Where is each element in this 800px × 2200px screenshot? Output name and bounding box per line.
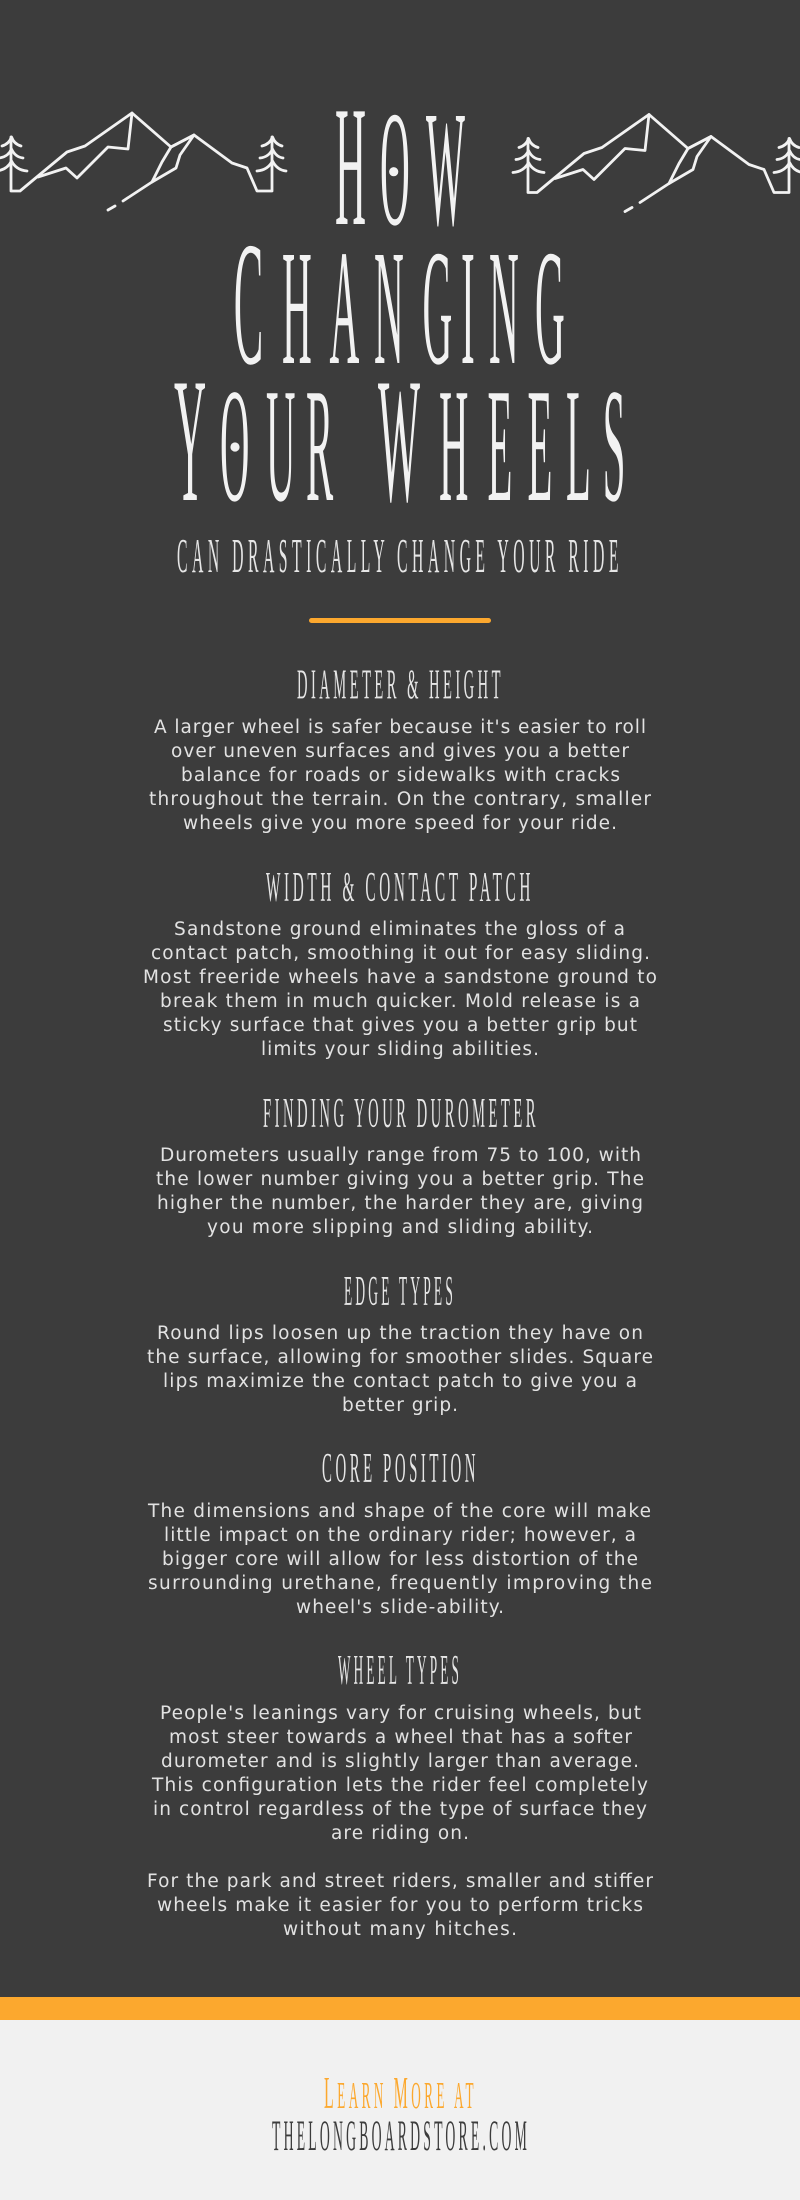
text block: the surface, allowing for smoother slides. Square bbox=[147, 1347, 653, 1368]
title: OW bbox=[380, 79, 465, 261]
title: H bbox=[335, 72, 366, 262]
text block: better grip. bbox=[342, 1395, 458, 1416]
text block: wheels give you more speed for your ride. bbox=[183, 813, 617, 834]
panel: diameter and height bbox=[149, 662, 651, 834]
panel: wheel types: WHEEL TYPES bbox=[338, 1648, 462, 1694]
text block: park and street: For the park and street riders, smaller and stiffer bbox=[147, 1871, 653, 1892]
text block: cruising wheels bbox=[151, 1703, 648, 1844]
icon: left mountains and trees bbox=[0, 113, 286, 210]
title: C bbox=[234, 205, 263, 401]
text block: Durometers usually range from 75 to 100, with bbox=[160, 1145, 641, 1166]
panel: width and contact patch bbox=[143, 865, 657, 1060]
text block bbox=[156, 1145, 644, 1238]
panel: finding your durometer bbox=[156, 1091, 644, 1238]
text block: limits your sliding abilities. bbox=[261, 1039, 539, 1060]
text block: cruising wheels: in control regardless of the type of surface they bbox=[153, 1799, 647, 1820]
text block: cruising wheels: most steer towards a wheel that has a softer bbox=[169, 1727, 632, 1748]
panel: wheel types bbox=[147, 1648, 653, 1940]
text block: A larger wheel is safer because it's easier to roll bbox=[154, 717, 646, 738]
text block bbox=[143, 919, 657, 1060]
text block: park and street: wheels make it easier for you to perform tricks bbox=[157, 1895, 643, 1916]
title: W bbox=[378, 342, 420, 540]
text block: cruising wheels: durometer and is slightly larger than average. bbox=[161, 1751, 639, 1772]
title: OUR bbox=[220, 355, 360, 536]
text block: sticky surface that gives you a better grip but bbox=[163, 1015, 637, 1036]
text block: bigger core will allow for less distortion of the bbox=[162, 1549, 638, 1570]
panel: edge types bbox=[147, 1269, 653, 1416]
text block bbox=[147, 1501, 652, 1618]
text block: The dimensions and shape of the core will make bbox=[147, 1501, 651, 1522]
text block: higher the number, the harder they are, giving bbox=[157, 1193, 643, 1214]
panel: core position: CORE POSITION bbox=[322, 1446, 479, 1492]
divider: orange rule bbox=[309, 618, 491, 623]
text block: balance for roads or sidewalks with cracks bbox=[181, 765, 620, 786]
orange band bbox=[0, 1997, 800, 2020]
text block: lips maximize the contact patch to give you a bbox=[163, 1371, 637, 1392]
text block: over uneven surfaces and gives you a better bbox=[171, 741, 629, 762]
text block bbox=[149, 717, 651, 834]
title: HEELS bbox=[439, 355, 625, 536]
icon: right mountains and trees bbox=[513, 114, 800, 212]
title: HANGING bbox=[282, 218, 565, 400]
text block: surrounding urethane, frequently improving the bbox=[148, 1573, 652, 1594]
title: Y bbox=[174, 342, 206, 540]
text block: Sandstone ground eliminates the gloss of a bbox=[174, 919, 625, 940]
text block: Most freeride wheels have a sandstone ground to bbox=[143, 967, 657, 988]
text block: the lower number giving you a better grip. The bbox=[156, 1169, 644, 1190]
text block bbox=[147, 1323, 653, 1416]
text block: Round lips loosen up the traction they have on bbox=[157, 1323, 643, 1344]
text block: break them in much quicker. Mold release is a bbox=[160, 991, 640, 1012]
text block: you more slipping and sliding ability. bbox=[207, 1217, 593, 1238]
footer: learn more at: LEARN MORE AT bbox=[324, 2067, 477, 2118]
text block: cruising wheels: are riding on. bbox=[331, 1823, 469, 1844]
panel: core position bbox=[147, 1446, 652, 1618]
title bbox=[174, 72, 625, 540]
text block: park and street bbox=[147, 1871, 653, 1940]
footer panel bbox=[0, 2020, 800, 2200]
text block: wheel's slide-ability. bbox=[296, 1597, 504, 1618]
text block: park and street: without many hitches. bbox=[283, 1919, 517, 1940]
text block: throughout the terrain. On the contrary, smaller bbox=[149, 789, 651, 810]
text block: cruising wheels: This configuration lets the rider feel completely bbox=[151, 1775, 648, 1796]
panel: edge types: EDGE TYPES bbox=[344, 1269, 456, 1315]
text block: cruising wheels: People's leanings vary for cruising wheels, but bbox=[160, 1703, 641, 1724]
text block: contact patch, smoothing it out for easy sliding. bbox=[151, 943, 650, 964]
text block: little impact on the ordinary rider; however, a bbox=[164, 1525, 636, 1546]
